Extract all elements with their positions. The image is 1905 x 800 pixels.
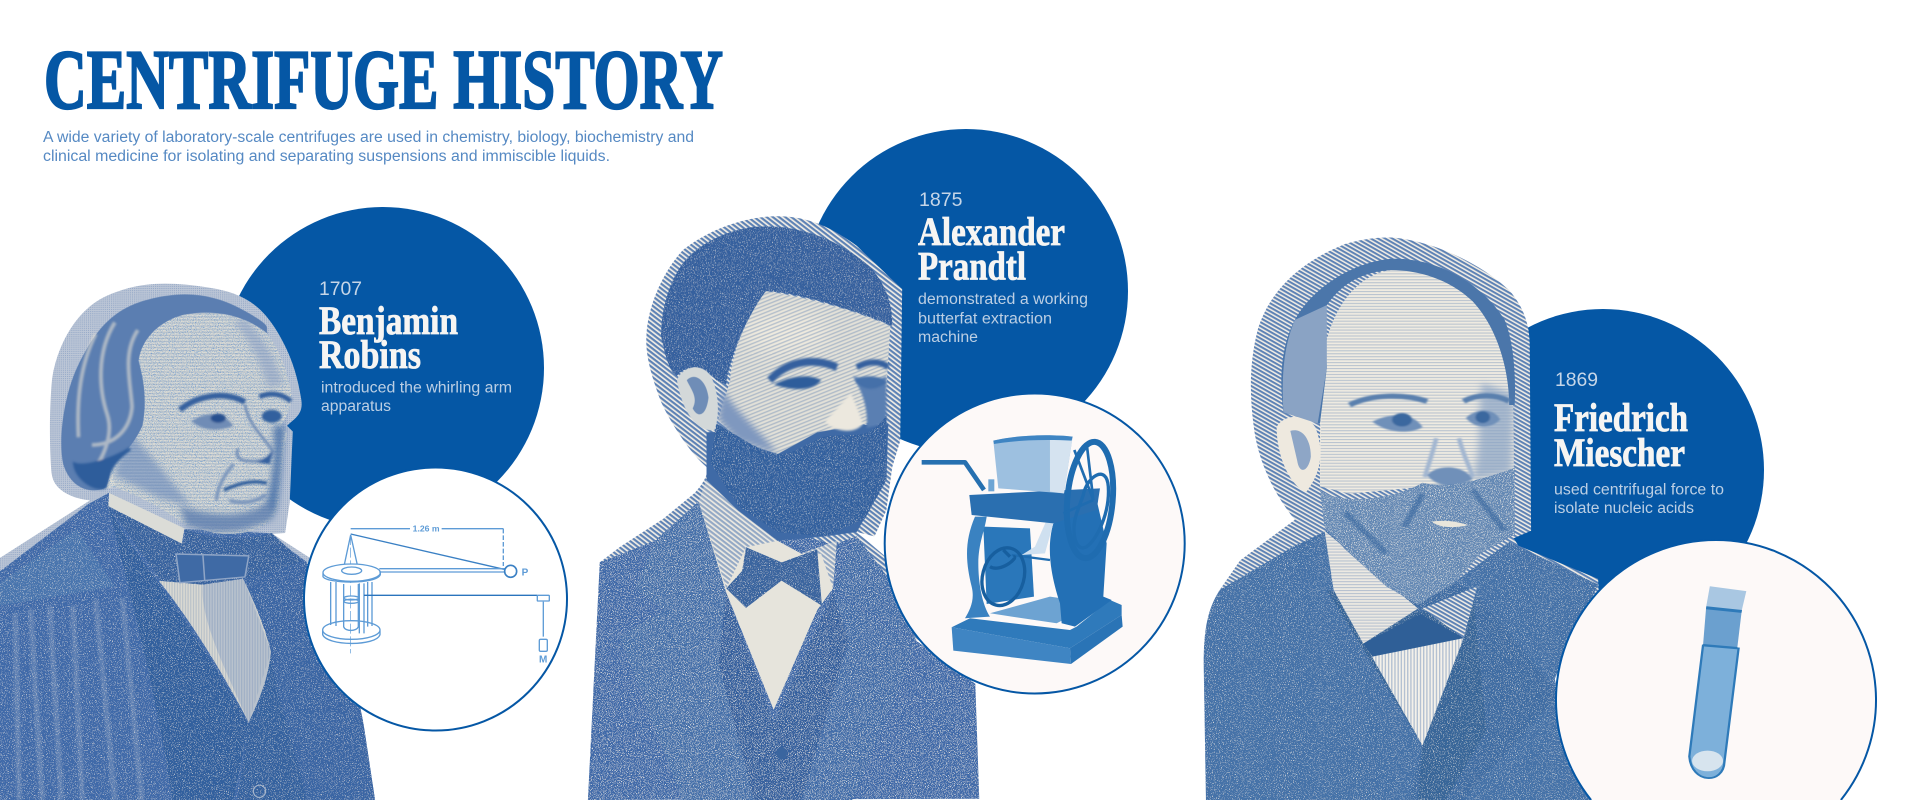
text: Prandtl year, name, description: demonstrated a working: [918, 291, 1088, 308]
panel: Benjamin Robins: [0, 207, 567, 800]
text: Prandtl year, name, description: butterfat extraction: [918, 310, 1052, 328]
text: Prandtl year, name, description: [918, 189, 1088, 346]
text: Robins year, name, description: [319, 278, 512, 415]
portrait: Friedrich Miescher: [1204, 237, 1600, 800]
blue circle: Prandtl: [804, 129, 1128, 453]
white circle: whirling arm apparatus: [304, 468, 567, 730]
text: Miescher year, name, description: isolate nucleic acids: [1554, 500, 1694, 517]
blue circle: Miescher: [1442, 309, 1764, 631]
title: CENTRIFUGE HISTORY: [44, 33, 723, 127]
subtitle text block: [43, 129, 694, 165]
icon: test tube: [1689, 586, 1746, 778]
subtitle text block: A wide variety of laboratory-scale centrifuges are used in chemistry, biology, biochemistry and: [43, 129, 694, 146]
portrait: Benjamin Robins: [0, 284, 383, 800]
icon: whirling arm apparatus diagram: M: [539, 655, 547, 666]
text: Prandtl year, name, description: 1875: [919, 189, 963, 211]
text: Robins year, name, description: Robins: [319, 332, 421, 377]
white circle: test tube: [1556, 540, 1876, 800]
text: Robins year, name, description: Benjamin: [319, 298, 458, 343]
icon: butterfat extraction machine: [922, 435, 1123, 664]
icon: whirling arm apparatus diagram: [323, 524, 549, 666]
text: Miescher year, name, description: used centrifugal force to: [1554, 482, 1724, 498]
text: Prandtl year, name, description: Alexander: [918, 209, 1065, 254]
text: Prandtl year, name, description: machine: [918, 329, 978, 346]
icon: whirling arm apparatus diagram: 1.26 m: [413, 524, 440, 534]
text: Miescher year, name, description: 1869: [1555, 369, 1598, 391]
portrait: Alexander Prandtl: [588, 216, 979, 800]
blue circle: Robins: [222, 207, 544, 529]
panel: Alexander Prandtl: [588, 129, 1185, 800]
text: Prandtl year, name, description: Prandtl: [918, 244, 1026, 288]
icon: whirling arm apparatus diagram: P: [522, 567, 529, 578]
text: Robins year, name, description: introduced the whirling arm: [321, 380, 512, 396]
text: Robins year, name, description: apparatus: [321, 398, 391, 415]
text: Miescher year, name, description: [1554, 369, 1724, 517]
white circle: butterfat machine: [885, 394, 1185, 694]
text: Miescher year, name, description: Friedrich: [1554, 395, 1688, 440]
text: Miescher year, name, description: Miescher: [1554, 430, 1685, 475]
subtitle text block: clinical medicine for isolating and separating suspensions and immiscible liquids.: [43, 148, 610, 165]
panel: Friedrich Miescher: [1204, 237, 1876, 800]
text: Robins year, name, description: 1707: [319, 278, 362, 300]
white circle outline: [1556, 540, 1876, 800]
